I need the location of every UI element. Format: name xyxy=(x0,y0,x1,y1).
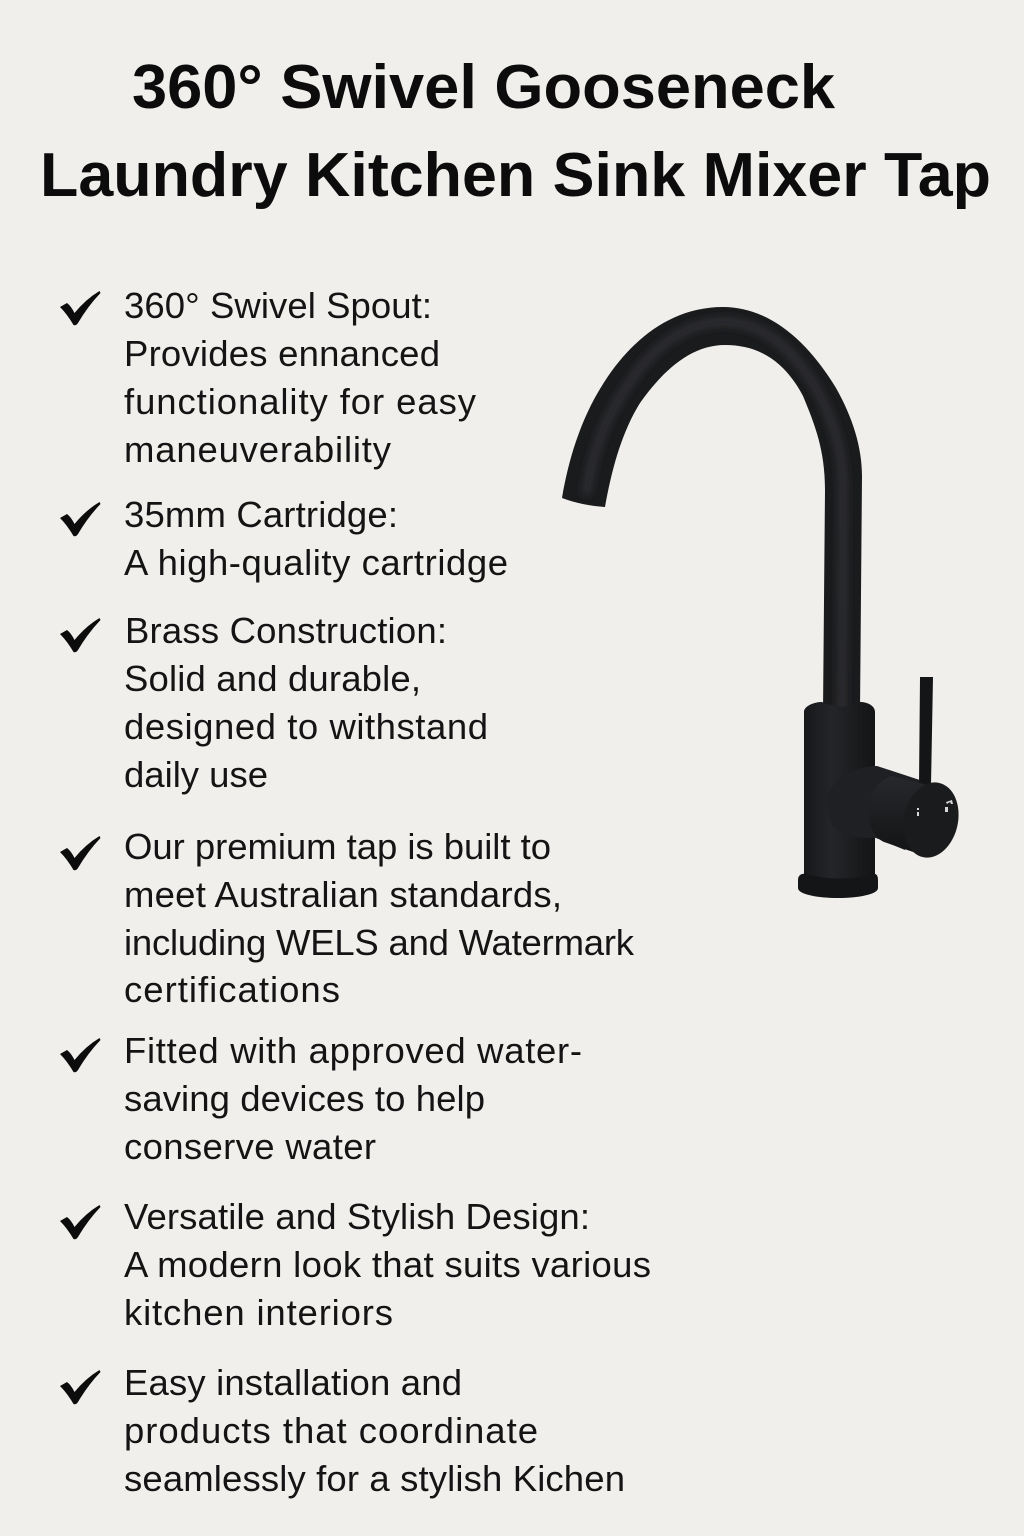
feature: versatile design xyxy=(60,1196,651,1333)
feature: versatile design: Versatile and Stylish Design: xyxy=(124,1196,590,1237)
handle cap xyxy=(897,777,965,863)
feature: brass construction xyxy=(60,610,488,795)
feature: 360 swivel spout: maneuverability xyxy=(124,429,392,470)
handle cylinder xyxy=(869,776,939,856)
icon: check mark xyxy=(60,836,100,870)
icon: check mark xyxy=(60,291,100,325)
feature: Australian standards xyxy=(60,826,635,1010)
feature: cartridge: 35mm Cartridge: xyxy=(124,494,398,535)
icon: check mark xyxy=(60,1205,100,1239)
feature: easy installation: Easy installation and xyxy=(124,1362,462,1403)
title xyxy=(40,53,991,210)
feature: easy installation xyxy=(60,1362,625,1499)
title: 360° Swivel Gooseneck xyxy=(132,53,836,122)
spout and neck xyxy=(562,307,862,712)
feature: 360 swivel spout: 360° Swivel Spout: xyxy=(124,285,432,326)
feature: easy installation: seamlessly for a stylish Kichen xyxy=(124,1458,625,1499)
feature: brass construction: designed to withstand xyxy=(124,706,488,747)
spout soft highlight xyxy=(586,322,843,712)
body xyxy=(804,702,875,880)
icon: check mark xyxy=(60,502,100,536)
feature: 360 swivel spout: functionality for easy xyxy=(124,381,477,422)
lever xyxy=(919,677,933,785)
feature: easy installation: products that coordinate xyxy=(124,1410,538,1451)
icon: check mark xyxy=(60,1370,100,1404)
product image: black gooseneck tap xyxy=(562,307,965,898)
feature: cartridge xyxy=(60,494,508,583)
feature: water saving: Fitted with approved water- xyxy=(124,1030,582,1071)
feature: water saving: conserve water xyxy=(124,1126,376,1167)
base xyxy=(798,874,878,898)
feature: brass construction: Solid and durable, xyxy=(124,658,421,699)
feature: water saving: saving devices to help xyxy=(124,1078,485,1119)
title: Laundry Kitchen Sink Mixer Tap xyxy=(40,141,991,210)
feature: brass construction: Brass Construction: xyxy=(125,610,447,651)
feature: versatile design: A modern look that suits various xyxy=(124,1244,651,1285)
feature: Australian standards: Our premium tap is built to xyxy=(124,826,551,867)
cap markings xyxy=(917,800,953,816)
feature: water saving xyxy=(60,1030,582,1167)
feature: versatile design: kitchen interiors xyxy=(124,1292,393,1333)
feature: 360 swivel spout: Provides ennanced xyxy=(124,333,440,374)
feature: cartridge: A high-quality cartridge xyxy=(124,542,508,583)
feature: Australian standards: certifications xyxy=(124,969,340,1010)
feature: 360 swivel spout xyxy=(60,285,477,470)
feature: Australian standards: meet Australian standards, xyxy=(124,874,562,915)
feature: brass construction: daily use xyxy=(124,754,268,795)
feature: Australian standards: including WELS and Watermark xyxy=(124,922,635,963)
icon: check mark xyxy=(60,1038,100,1072)
icon: check mark xyxy=(60,618,100,652)
hub xyxy=(826,766,935,850)
